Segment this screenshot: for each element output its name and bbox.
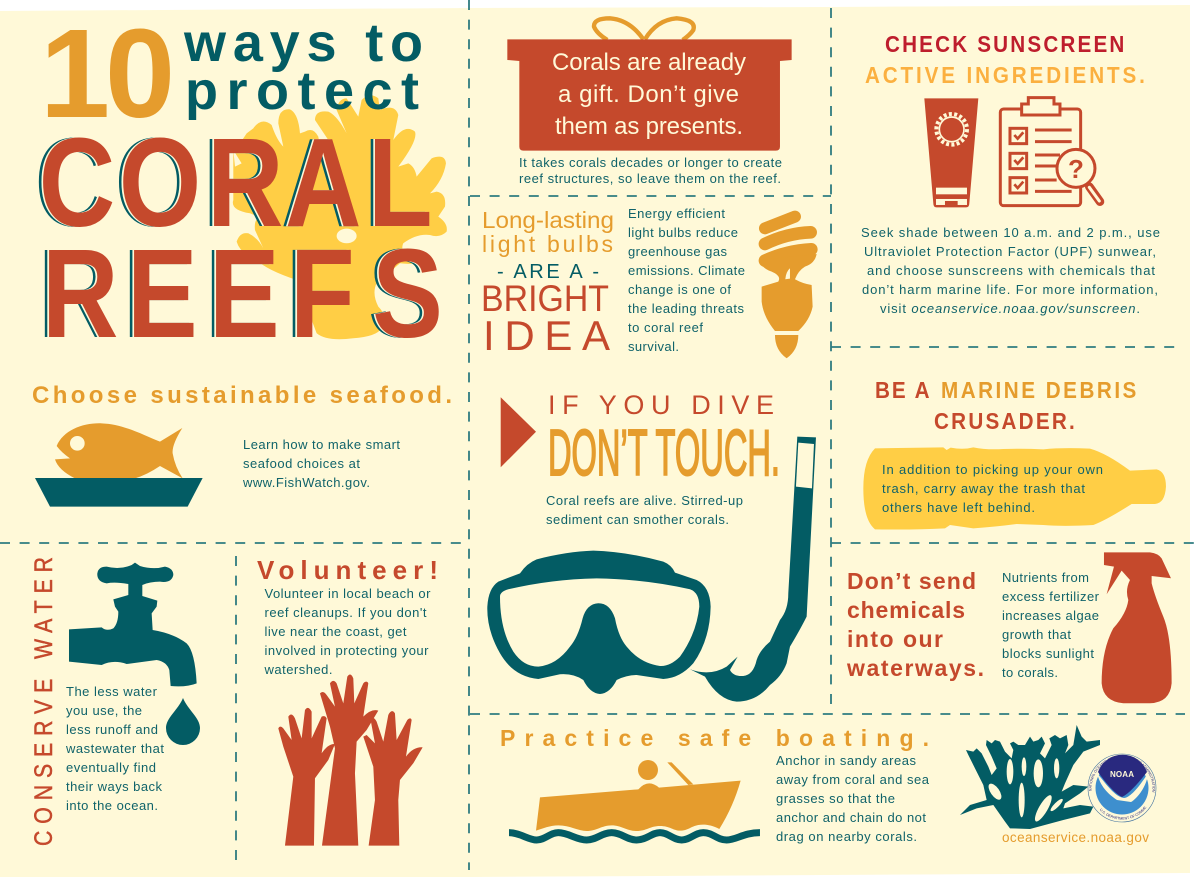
heading: chemicals: chemicals	[847, 597, 965, 623]
text: safe boating: away from coral and sea	[776, 772, 930, 787]
text: marine debris: In addition to picking up your own	[882, 462, 1103, 477]
text: light bulbs: light bulbs reduce	[628, 225, 738, 240]
heading: bright idea: - ARE A -	[497, 261, 599, 283]
heading: ways to protect: protect	[185, 61, 419, 121]
icon: noaa logo: NOAA	[1110, 770, 1134, 779]
heading: coral: CORAL	[35, 112, 428, 253]
text: volunteer: involved in protecting your	[264, 643, 429, 658]
text: sunscreen: don’t harm marine life. For more information,	[862, 282, 1158, 297]
text: coral gift	[519, 155, 782, 186]
text: sunscreen: Seek shade between 10 a.m. and 2 p.m., use	[861, 225, 1160, 240]
text: safe boating: Anchor in sandy areas	[776, 753, 916, 768]
heading: corals are a gift: them as presents.	[555, 113, 743, 140]
panel: dive	[487, 390, 816, 702]
text: light bulbs: survival.	[628, 339, 679, 354]
heading: reefs: REEFS	[40, 223, 441, 364]
text: volunteer: watershed.	[264, 662, 332, 677]
icon: faucet	[69, 563, 197, 686]
heading: corals are a gift	[552, 49, 746, 140]
text: website: oceanservice.noaa.gov	[1002, 830, 1149, 845]
text: marine debris	[882, 462, 1103, 515]
text: coral gift: reef structures, so leave them on the reef.	[519, 171, 781, 186]
text: chemicals: to corals.	[1002, 665, 1058, 680]
text: chemicals: growth that	[1002, 627, 1071, 642]
number 10: 0	[105, 3, 175, 144]
text: safe boating: grasses so that the	[776, 791, 895, 806]
icon: clipboard with magnifier	[1000, 98, 1100, 206]
text: chemicals: blocks sunlight	[1002, 646, 1094, 661]
heading: if you dive: IF YOU DIVE	[548, 390, 774, 420]
heading: chemicals: Don’t send	[847, 568, 976, 594]
icon: teal coral	[960, 725, 1100, 829]
heading: reefs: REEFS	[42, 223, 443, 364]
text: volunteer: Volunteer in local beach or	[264, 586, 431, 601]
heading: ways to protect: ways to	[183, 13, 423, 73]
panel: safe boating	[500, 725, 930, 844]
heading: bright idea: BRIGHT	[481, 278, 609, 319]
panel: sunscreen	[861, 31, 1160, 316]
text: volunteer	[264, 586, 431, 677]
text: conserve water: their ways back	[66, 779, 162, 794]
icon: light bulb	[759, 217, 817, 358]
heading: seafood: Choose sustainable seafood.	[32, 382, 452, 409]
panel: title	[35, 3, 447, 364]
icon: sunscreen tube	[924, 98, 978, 207]
text: chemicals	[1002, 570, 1100, 680]
icon: dive mask	[487, 551, 711, 694]
text: conserve water: you use, the	[66, 703, 142, 718]
text: sunscreen	[861, 225, 1160, 316]
icon: yellow coral	[233, 95, 447, 339]
heading: check sunscreen: ACTIVE INGREDIENTS.	[865, 62, 1145, 88]
heading: corals are a gift: a gift. Don’t give	[558, 81, 739, 108]
heading: bright idea: IDEA	[483, 312, 610, 359]
text: marine debris: trash, carry away the trash that	[882, 481, 1085, 496]
text: light bulbs: greenhouse gas	[628, 244, 728, 259]
text: safe boating: anchor and chain do not	[776, 810, 926, 825]
icon: water drop	[166, 698, 200, 745]
number 10: 1	[40, 3, 110, 144]
panel: chemicals	[846, 552, 1172, 703]
icon: snorkel	[690, 437, 816, 702]
text: sunscreen: Ultraviolet Protection Factor (UPF) sunwear,	[864, 244, 1156, 259]
text: sunscreen: visit oceanservice.noaa.gov/sunscreen.	[880, 301, 1140, 316]
text: safe boating	[776, 753, 930, 844]
text: chemicals: excess fertilizer	[1002, 589, 1100, 604]
text: light bulbs: the leading threats	[628, 301, 744, 316]
text: marine debris: others have left behind.	[882, 500, 1035, 515]
text: conserve water: The less water	[66, 684, 158, 699]
panel: coral gift	[507, 18, 792, 186]
text: sunscreen: and choose sunscreens with chemicals that	[867, 263, 1155, 278]
panel: light bulbs	[481, 206, 817, 359]
heading: safe boating: Practice safe boating.	[500, 725, 929, 751]
text: seafood: seafood choices at	[243, 456, 360, 471]
text: conserve water: into the ocean.	[66, 798, 158, 813]
text: seafood: www.FishWatch.gov.	[242, 475, 370, 490]
text: volunteer: live near the coast, get	[264, 624, 407, 639]
text: conserve water: less runoff and	[66, 722, 158, 737]
text: chemicals: increases algae	[1002, 608, 1099, 623]
icon: triangle	[501, 397, 536, 467]
heading: chemicals	[846, 568, 984, 681]
panel: marine debris	[863, 377, 1166, 530]
text: light bulbs: Energy efficient	[628, 206, 725, 221]
heading: coral: CORAL	[37, 112, 431, 253]
text: safe boating: drag on nearby corals.	[776, 829, 917, 844]
icon: noaa logo: U.S. DEPARTMENT OF COMMERCE	[1100, 806, 1146, 820]
heading: volunteer: Volunteer!	[257, 555, 438, 585]
heading: check sunscreen	[865, 31, 1145, 88]
icon: boat	[509, 760, 760, 840]
text: light bulbs: to coral reef	[628, 320, 703, 335]
heading: chemicals: waterways.	[846, 655, 984, 681]
heading: ways to protect	[183, 13, 423, 121]
heading: marine debris: BE A	[875, 377, 930, 403]
text: conserve water: wastewater that	[65, 741, 164, 756]
text: conserve water: eventually find	[66, 760, 156, 775]
icon: noaa logo: NATIONAL OCEANIC AND ATMOSPHERIC ADMINISTRATION	[1089, 756, 1155, 792]
text: light bulbs: change is one of	[628, 282, 731, 297]
panel: conserve water	[29, 557, 200, 846]
text: volunteer: reef cleanups. If you don't	[264, 605, 427, 620]
heading: conserve water: CONSERVE WATER	[29, 557, 57, 846]
text: coral gift: It takes corals decades or longer to create	[519, 155, 782, 170]
panel: volunteer	[257, 555, 438, 846]
text: seafood: Learn how to make smart	[243, 437, 400, 452]
text: chemicals: Nutrients from	[1002, 570, 1089, 585]
heading: marine debris: MARINE DEBRIS	[941, 377, 1136, 403]
heading: marine debris	[875, 377, 1136, 434]
icon: raised hands	[278, 675, 423, 846]
icon: bottle	[863, 447, 1166, 530]
icon: spray bottle	[1102, 552, 1172, 703]
panel: choose sustainable seafood	[32, 382, 452, 507]
text: dive: sediment can smother corals.	[546, 512, 729, 527]
icon: fish on plate	[35, 423, 203, 507]
heading: bright idea: Long-lasting	[482, 207, 614, 233]
heading: chemicals: into our	[847, 626, 943, 652]
heading: coral: CORAL	[39, 112, 433, 253]
icon: gift box	[507, 39, 792, 151]
text: light bulbs: emissions. Climate	[628, 263, 745, 278]
heading: don't touch: DON’T TOUCH.	[548, 416, 780, 489]
heading: bright idea	[481, 207, 614, 359]
heading: check sunscreen: CHECK SUNSCREEN	[885, 31, 1124, 57]
text: dive	[546, 493, 743, 527]
heading: bright idea: light bulbs	[482, 231, 613, 257]
heading: marine debris: CRUSADER.	[934, 408, 1075, 434]
text: conserve water	[65, 684, 164, 813]
text: light bulbs	[628, 206, 745, 354]
text: seafood	[242, 437, 400, 490]
icon: clipboard with magnifier: ?	[1068, 154, 1084, 184]
icon: gift bow	[594, 18, 694, 40]
heading: reefs: REEFS	[38, 223, 439, 364]
text: dive: Coral reefs are alive. Stirred-up	[546, 493, 743, 508]
heading: corals are a gift: Corals are already	[552, 49, 746, 76]
